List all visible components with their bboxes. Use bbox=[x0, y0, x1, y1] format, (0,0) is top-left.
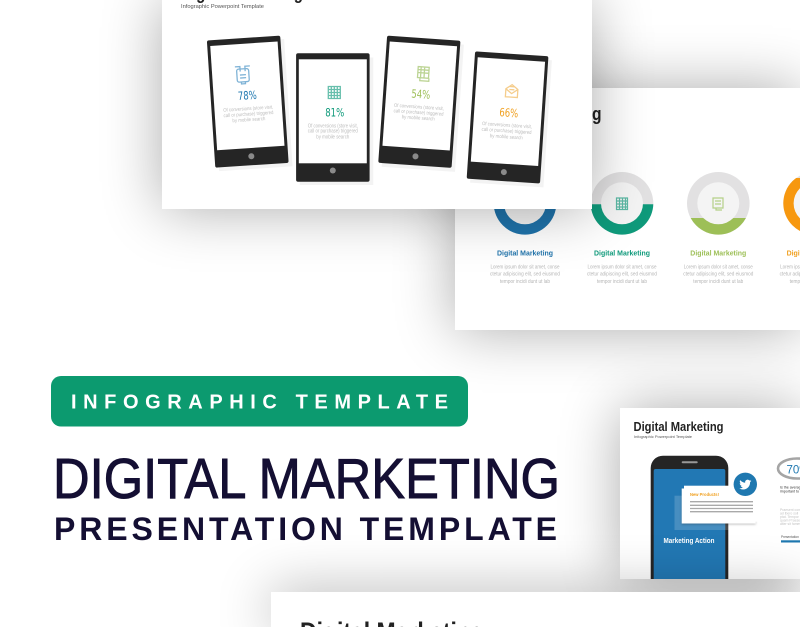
progress bar bbox=[781, 535, 800, 542]
column text: green: tempor incidi dunt ut lab bbox=[693, 279, 743, 285]
donut: orange bbox=[783, 172, 800, 235]
column text: orange bbox=[780, 248, 800, 285]
stat: 66%: 66% bbox=[499, 105, 519, 120]
badge: INFOGRAPHIC TEMPLATE bbox=[71, 392, 448, 414]
icon: envelope bbox=[505, 84, 518, 98]
column text: blue: Lorem ipsum dolor sit amet, conse bbox=[490, 264, 560, 270]
description bbox=[308, 123, 358, 140]
description bbox=[481, 121, 532, 142]
panel: bottom slide bbox=[271, 592, 800, 627]
description: Of conversions (store visit, bbox=[394, 103, 444, 112]
column text: teal: Digital Marketing bbox=[594, 248, 650, 258]
slide heading: Digital Marketing bbox=[476, 104, 602, 124]
card lines bbox=[690, 502, 753, 512]
description: by mobile search bbox=[232, 116, 266, 124]
slide subtitle: Infographic Powerpoint Template bbox=[634, 435, 692, 439]
tablet: 54% bbox=[378, 36, 464, 172]
card heading: New Products! bbox=[690, 492, 719, 497]
tablet: 78% bbox=[207, 35, 293, 171]
panel: phone marketing slide bbox=[620, 408, 800, 579]
stat caption: important to bbox=[780, 490, 799, 494]
subtitle: PRESENTATION TEMPLATE bbox=[54, 511, 557, 547]
description: by mobile search bbox=[490, 133, 523, 141]
icon: network bbox=[328, 86, 340, 98]
stat: 78%: 78% bbox=[237, 88, 257, 103]
paragraph: ad lbero soll bbox=[780, 512, 799, 516]
description: Of conversions (store visit, bbox=[223, 104, 273, 114]
description bbox=[393, 103, 444, 123]
slide subtitle: Infographic Powerpoint Template bbox=[181, 4, 264, 10]
icon: robot head bbox=[235, 66, 251, 84]
message card bbox=[682, 486, 758, 524]
description: Of conversions (store visit, bbox=[482, 121, 532, 130]
column text: teal: Lorem ipsum dolor sit amet, conse bbox=[588, 264, 657, 270]
donut: blue bbox=[494, 209, 556, 235]
column text: blue bbox=[490, 248, 560, 285]
panel: four circles slide bbox=[455, 88, 800, 330]
description: by mobile search bbox=[401, 114, 435, 123]
paragraph: ptat. Tempor bbox=[780, 515, 800, 519]
description: by mobile search bbox=[316, 134, 349, 140]
column text: green bbox=[683, 248, 753, 285]
slide heading: Digital Marketing bbox=[634, 419, 724, 434]
column text: green: ctetur adipiscing elit, sed eiusmod bbox=[683, 272, 753, 278]
smartphone bbox=[651, 456, 728, 579]
label: Marketing Action bbox=[664, 536, 715, 545]
translucent card bbox=[674, 496, 758, 530]
column text: green: Lorem ipsum dolor sit amet, conse bbox=[684, 264, 753, 270]
stat ring: 70% bbox=[778, 458, 800, 478]
column text: blue: ctetur adipiscing elit, sed eiusmod bbox=[490, 272, 560, 278]
column text: teal bbox=[587, 248, 657, 285]
description: call or purchase) triggered bbox=[308, 129, 358, 135]
progress bar: Presentation bbox=[781, 535, 799, 539]
description: Of conversions (store visit, bbox=[308, 123, 358, 129]
stat: 54%: 54% bbox=[411, 87, 431, 102]
paragraph bbox=[780, 508, 800, 526]
badge bbox=[51, 376, 468, 426]
stat: 81%: 81% bbox=[325, 106, 344, 120]
tablet: 66% bbox=[466, 51, 552, 187]
column text: blue: tempor incidi dunt ut lab bbox=[500, 279, 550, 285]
icon: twitter badge bbox=[734, 473, 757, 496]
description bbox=[223, 104, 274, 125]
donut: teal bbox=[591, 172, 653, 235]
description: call or purchase) triggered bbox=[393, 108, 444, 118]
tablet: 81% bbox=[296, 53, 373, 185]
description: call or purchase) triggered bbox=[481, 127, 532, 136]
donut: green bbox=[687, 172, 750, 235]
column text: teal: tempor incidi dunt ut lab bbox=[597, 279, 647, 285]
column text: teal: ctetur adipiscing elit, sed eiusmod bbox=[587, 272, 657, 278]
description: call or purchase) triggered bbox=[223, 110, 274, 119]
column text: blue: Digital Marketing bbox=[497, 248, 553, 258]
stat caption bbox=[780, 486, 800, 494]
icon: monitor bbox=[417, 67, 430, 81]
panel: tablets slide bbox=[162, 0, 592, 209]
main title: DIGITAL MARKETING bbox=[53, 447, 560, 511]
column text: green: Digital Marketing bbox=[690, 248, 747, 258]
